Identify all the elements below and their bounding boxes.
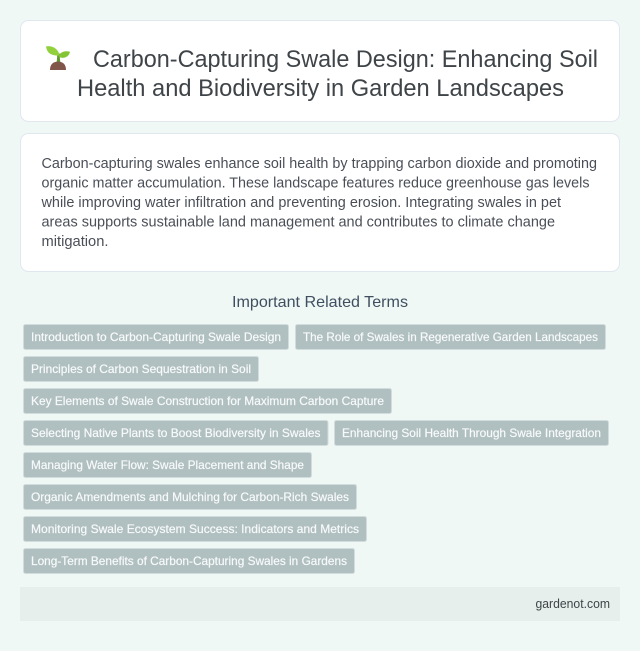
summary text: mitigation. [42, 234, 108, 250]
tag [24, 356, 258, 382]
tag: Principles of Carbon Sequestration in Soil [31, 362, 251, 376]
heading: important related terms: Important Related Terms [232, 294, 408, 311]
title [77, 46, 598, 102]
tag: The Role of Swales in Regenerative Garden Landscapes [303, 330, 598, 344]
tag: Introduction to Carbon-Capturing Swale Design [31, 330, 281, 344]
tag [24, 420, 328, 446]
footer: gardenot.com [536, 597, 610, 611]
tag: Organic Amendments and Mulching for Carbon-Rich Swales [31, 490, 349, 504]
tag: Selecting Native Plants to Boost Biodiversity in Swales [31, 426, 320, 440]
summary text [41, 156, 597, 250]
title: Health and Biodiversity in Garden Landscapes [77, 75, 564, 102]
tag [24, 548, 354, 574]
tag: Long-Term Benefits of Carbon-Capturing Swales in Gardens [31, 554, 347, 568]
tag: Enhancing Soil Health Through Swale Integration [342, 426, 601, 440]
tag [24, 452, 312, 478]
tag: Key Elements of Swale Construction for Maximum Carbon Capture [31, 394, 384, 408]
tag: Managing Water Flow: Swale Placement and Shape [31, 458, 304, 472]
tag list [24, 324, 608, 574]
tag [24, 516, 366, 542]
footer [20, 587, 620, 621]
panel: summary card [20, 134, 620, 272]
icon: seedling [46, 46, 70, 70]
tag [24, 324, 288, 350]
summary text: areas supports sustainable land management and contributes to climate change [42, 214, 555, 230]
title: Carbon-Capturing Swale Design: Enhancing Soil [93, 46, 598, 73]
summary text: while improving water infiltration and preventing erosion. Integrating swales in pet [41, 195, 561, 211]
summary text: organic matter accumulation. These landscape features reduce greenhouse gas levels [42, 176, 590, 192]
tag: Monitoring Swale Ecosystem Success: Indicators and Metrics [31, 522, 359, 536]
summary text: Carbon-capturing swales enhance soil health by trapping carbon dioxide and promoting [42, 156, 597, 172]
panel: title card [20, 20, 620, 122]
tag [334, 420, 608, 446]
tag [296, 324, 606, 350]
tag [24, 484, 356, 510]
tag [24, 388, 392, 414]
